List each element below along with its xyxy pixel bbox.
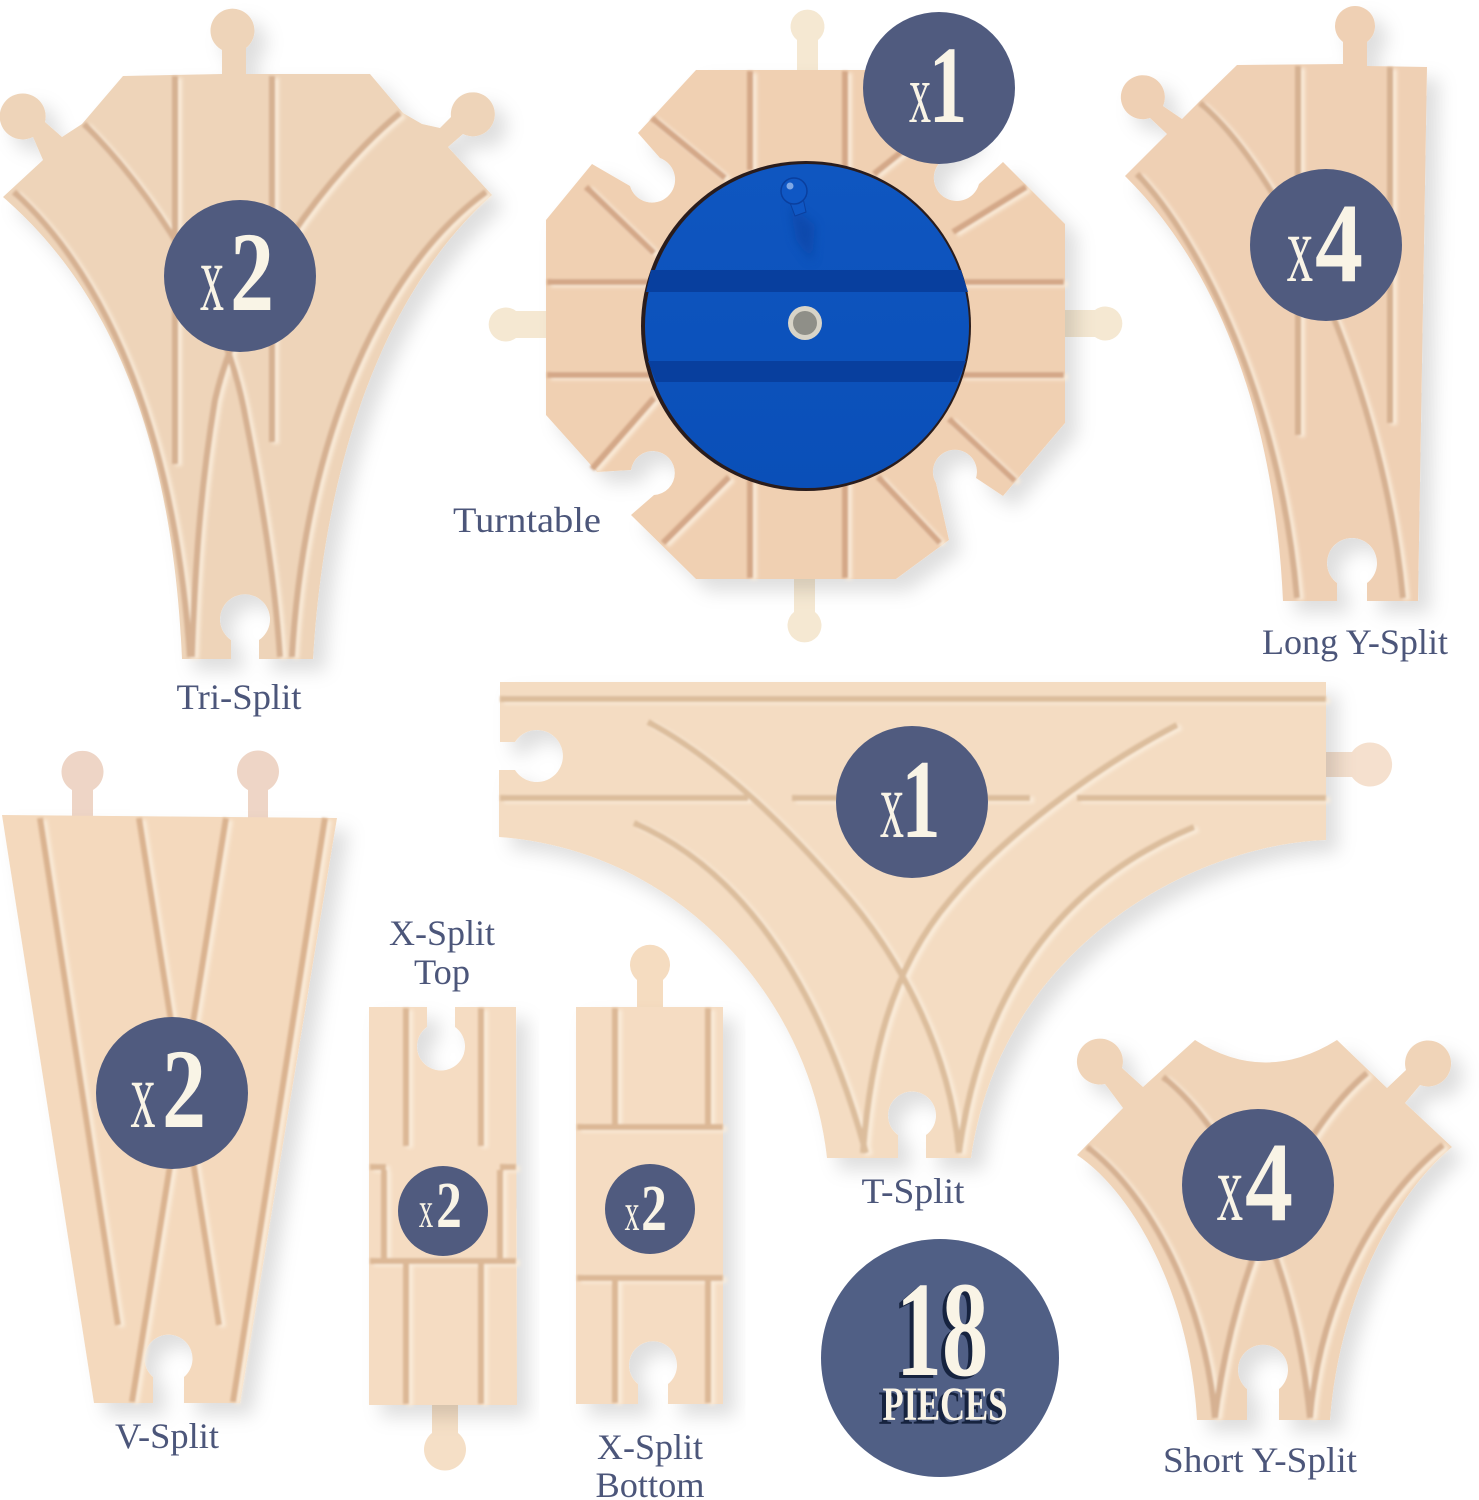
piece: V-Split [2, 751, 337, 1403]
badge: 18 pieces total: 18 [896, 1255, 988, 1405]
v-split pegs [62, 751, 279, 820]
long y-split wood body [1121, 6, 1427, 601]
turntable grooves [547, 71, 1064, 578]
badge: x4 short y-split: 4 [1245, 1120, 1293, 1245]
badge: x4 short y-split: x [1217, 1134, 1243, 1241]
badge: x1 t-split: 1 [901, 737, 941, 861]
badge: x2 x-split top: x [419, 1182, 433, 1239]
badge: x2 x-split bottom: x [625, 1183, 640, 1242]
label: T-Split: T-Split [862, 1171, 964, 1211]
blue peg [781, 178, 815, 262]
x-split top wood body [369, 1007, 517, 1405]
badge: 18 pieces total [821, 1239, 1059, 1477]
badge: x1 turntable: x [909, 47, 931, 141]
badge: x4 long y-split: 4 [1315, 181, 1363, 306]
badge: 18 pieces total: PIECES [882, 1378, 1008, 1431]
t-split wood body [499, 682, 1326, 1158]
label: Long Y-Split: Long Y-Split [1262, 622, 1448, 662]
x-split bottom grooves [577, 1008, 723, 1403]
badge: x2 tri-split [164, 200, 316, 352]
badge: x4 long y-split [1250, 169, 1402, 321]
piece: T-Split [499, 682, 1392, 1158]
badge: x2 x-split bottom [605, 1164, 695, 1254]
badge: x1 turntable [863, 12, 1015, 164]
badge: x2 x-split top [398, 1166, 488, 1256]
badge: x1 t-split: x [880, 752, 904, 859]
x-split bottom peg [630, 945, 670, 1010]
piece: Turntable [489, 10, 1122, 642]
badge: x2 tri-split: x [200, 225, 224, 332]
t-split grooves [500, 699, 1326, 1153]
t-split peg [1322, 742, 1392, 786]
tri-split grooves [14, 76, 486, 657]
metal rivet [788, 306, 822, 340]
short y-split grooves [1087, 1073, 1443, 1418]
badge: x2 tri-split: 2 [230, 210, 274, 335]
badge: x1 turntable: 1 [929, 24, 967, 146]
piece: Long Y-Split [1121, 6, 1427, 601]
badge: x2 v-split [96, 1017, 248, 1169]
label: X-Split Bottom [596, 1427, 704, 1500]
label: X-Split Top [389, 913, 495, 992]
badge: x2 v-split: 2 [162, 1027, 206, 1152]
v-split wood body [2, 815, 337, 1403]
badge: 18 pieces total: 18 [892, 1258, 984, 1408]
badge: x4 short y-split [1182, 1109, 1334, 1261]
tri-split wood body [0, 9, 495, 659]
turntable pegs [489, 10, 1122, 642]
label: X-Split Top: Top [414, 952, 470, 992]
long y-split grooves [1137, 66, 1403, 598]
label: X-Split Bottom: X-Split [597, 1427, 703, 1467]
label: Tri-Split: Tri-Split [176, 677, 302, 717]
piece: X-Split Bottom [576, 945, 723, 1404]
badge: x1 t-split [836, 726, 988, 878]
label: V-Split: V-Split [115, 1416, 219, 1456]
piece: Tri-Split [0, 9, 495, 659]
label: Short Y-Split: Short Y-Split [1163, 1440, 1357, 1480]
x-split bottom wood body [576, 1007, 723, 1404]
badge: x2 x-split top: 2 [436, 1168, 462, 1241]
label: X-Split Top: X-Split [389, 913, 495, 953]
v-split grooves [40, 818, 325, 1402]
piece: X-Split Top [369, 1007, 517, 1470]
x-split top peg [424, 1400, 466, 1470]
x-split top grooves [370, 1008, 516, 1404]
badge: 18 pieces total: PIECES [878, 1382, 1004, 1435]
badge: x4 long y-split: x [1287, 195, 1313, 302]
short y-split wood body [1077, 1039, 1452, 1420]
piece: Short Y-Split [1077, 1039, 1452, 1420]
label: Turntable: Turntable [453, 500, 601, 540]
turntable blue disc [641, 161, 971, 491]
badge: x2 x-split bottom: 2 [641, 1171, 667, 1244]
turntable wood octagon [546, 70, 1065, 579]
badge: x2 v-split: x [131, 1042, 155, 1148]
